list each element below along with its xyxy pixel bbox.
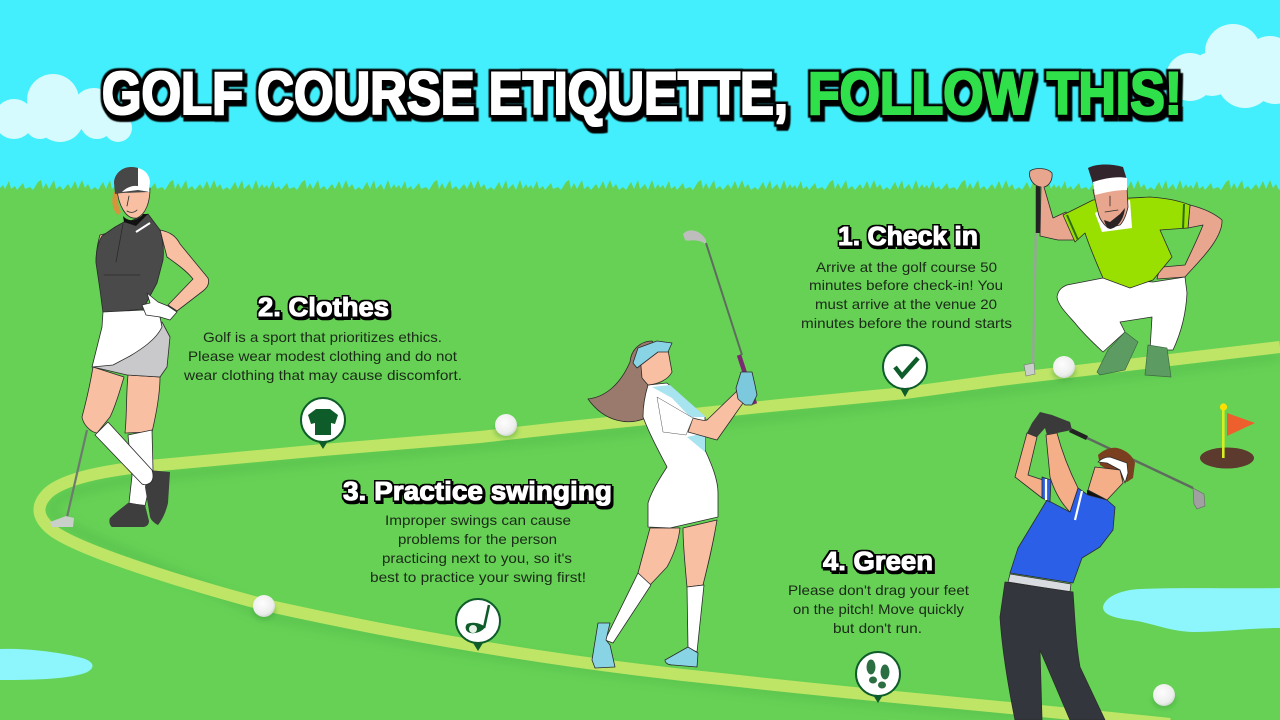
white skirt — [92, 310, 162, 367]
trousers — [1057, 277, 1187, 352]
sleeve stripes — [1046, 479, 1082, 520]
body 1 — [801, 259, 1012, 331]
club — [1070, 430, 1205, 509]
sock front — [687, 585, 704, 652]
heading 3: 3. Practice swinging — [343, 478, 612, 506]
face — [117, 188, 150, 218]
black neck — [1087, 490, 1107, 503]
headband — [1098, 457, 1128, 483]
thigh front — [683, 520, 717, 587]
shoe rear — [592, 623, 615, 668]
title: white part: GOLF COURSE ETIQUETTE, — [102, 60, 788, 127]
shoe front — [665, 647, 698, 667]
standing shoe — [109, 503, 149, 527]
sock rear — [605, 573, 651, 643]
title — [102, 60, 1182, 127]
body 3 — [370, 512, 586, 585]
cloud: right — [1166, 24, 1280, 108]
body 2: Please wear modest clothing and do not — [188, 348, 457, 364]
arm — [688, 390, 743, 440]
grey skirt — [93, 322, 170, 377]
body 3: best to practice your swing first! — [370, 569, 586, 585]
pond: right — [1103, 588, 1280, 632]
collar — [1095, 200, 1132, 232]
head — [1088, 467, 1123, 500]
glove — [142, 293, 177, 320]
face details — [127, 196, 137, 212]
body 1: must arrive at the venue 20 — [815, 296, 997, 312]
beard — [1104, 208, 1125, 229]
visor — [1093, 177, 1127, 195]
text block 3: practice swinging — [343, 478, 612, 585]
crossed thigh — [82, 367, 124, 433]
body 3: practicing next to you, so it's — [382, 550, 572, 566]
standing sock — [128, 430, 153, 506]
body 1: minutes before the round starts — [801, 315, 1012, 331]
golf ball 4 — [1152, 684, 1176, 709]
fairway path shadow — [52, 356, 1280, 720]
sky background — [0, 0, 1280, 190]
shirt — [1010, 488, 1115, 583]
character: woman swinging — [588, 230, 757, 668]
fairway path — [39, 347, 1280, 720]
left shoe — [1097, 332, 1138, 375]
icon: footprints pin — [856, 652, 900, 703]
collar stripe — [136, 223, 150, 232]
visor — [633, 341, 672, 368]
trousers — [1000, 582, 1105, 720]
front arm — [1046, 433, 1078, 512]
golf ball 3 — [252, 595, 276, 620]
back leg — [125, 375, 160, 433]
lime shirt — [1063, 197, 1190, 288]
body 3: Improper swings can cause — [385, 512, 571, 528]
body 2 — [183, 329, 462, 383]
left shoulder — [96, 232, 112, 270]
golf ball 1 — [1052, 356, 1076, 381]
body 1: minutes before check-in! You — [809, 277, 1003, 293]
club — [1024, 186, 1038, 376]
club — [683, 230, 755, 404]
text block 1: check in — [801, 223, 1012, 331]
hair — [1088, 164, 1127, 186]
left arm — [1015, 433, 1043, 498]
gloves — [736, 372, 757, 405]
head — [1093, 188, 1128, 228]
dress blue panels — [652, 385, 706, 417]
golf club — [50, 430, 87, 527]
front shoe — [145, 470, 170, 525]
character: woman in black — [50, 167, 209, 527]
sleeve — [657, 397, 693, 435]
flag and hole — [1200, 403, 1255, 468]
right arm — [160, 230, 209, 311]
black top — [96, 214, 163, 313]
body 1: Arrive at the golf course 50 — [816, 259, 997, 275]
face — [640, 350, 672, 385]
neck shadow — [123, 214, 148, 226]
dress — [643, 383, 718, 528]
belt — [1008, 574, 1071, 592]
crossed sock — [95, 422, 153, 485]
body 2: Golf is a sport that prioritizes ethics. — [203, 329, 442, 345]
face details — [1105, 196, 1118, 212]
right shoe — [1145, 345, 1171, 377]
body 2: wear clothing that may cause discomfort. — [183, 367, 462, 383]
title: green part: FOLLOW THIS! — [808, 60, 1182, 127]
golf ball 2 — [494, 414, 518, 439]
icon: golf club pin — [456, 599, 500, 651]
icon: check mark pin — [883, 345, 927, 397]
body 4: Please don't drag your feet — [788, 582, 969, 598]
fist and arm — [1030, 169, 1075, 240]
body 3: problems for the person — [398, 531, 557, 547]
body 4: but don't run. — [833, 620, 922, 636]
pond: left — [0, 649, 93, 680]
hair strand — [112, 192, 121, 215]
left sleeve — [1042, 477, 1051, 502]
heading 2: 2. Clothes — [258, 294, 389, 322]
body 4 — [788, 582, 969, 636]
character: man in blue shirt — [1000, 412, 1205, 720]
body 4: on the pitch! Move quickly — [793, 601, 964, 617]
cloud: left — [0, 74, 132, 142]
character: man in lime shirt — [1024, 164, 1222, 377]
text block 2: clothes — [183, 294, 462, 383]
hair — [1098, 448, 1135, 482]
cap — [114, 167, 150, 194]
heading 4: 4. Green — [823, 548, 933, 576]
hair — [588, 341, 662, 422]
gloves — [1027, 412, 1072, 437]
grass field — [0, 175, 1280, 720]
text block 4: green — [788, 548, 969, 636]
heading 1: 1. Check in — [838, 223, 978, 251]
thigh rear — [638, 528, 680, 585]
right arm — [1157, 205, 1222, 279]
icon: shirt pin — [301, 398, 345, 449]
